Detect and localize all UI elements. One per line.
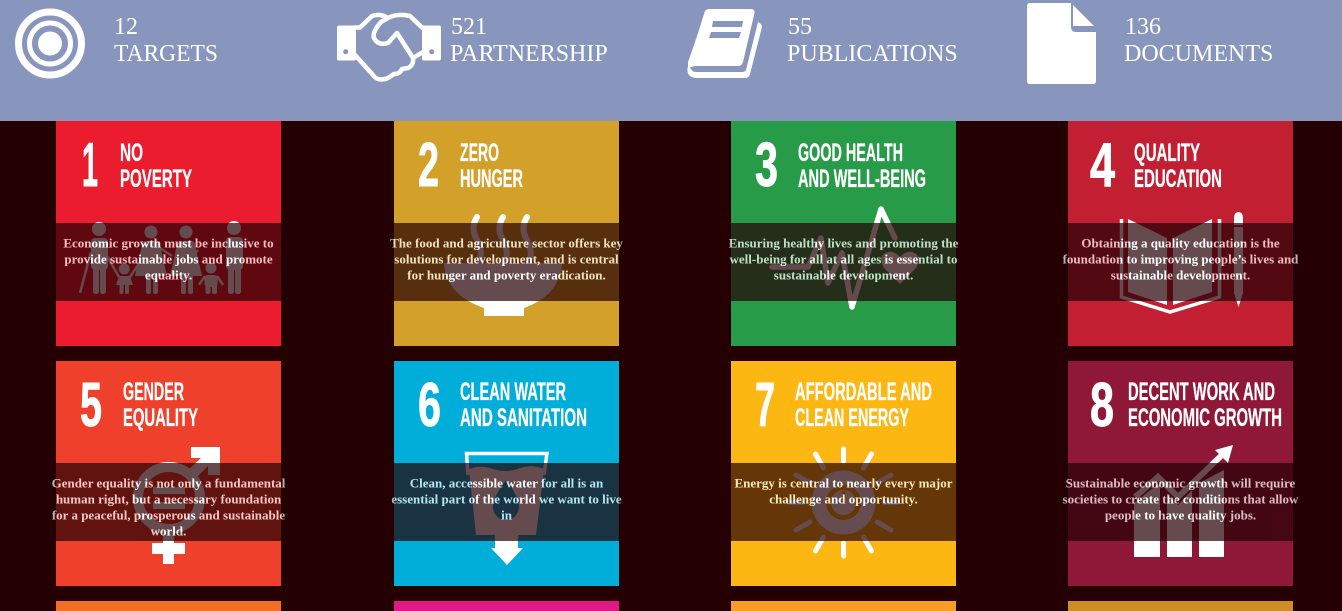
- stat: publications: 55: [788, 14, 812, 40]
- icon: book and pencil: [1122, 212, 1243, 312]
- card: goal 3 good health: [729, 121, 959, 346]
- goal title: HUNGER: [460, 165, 523, 193]
- stat: documents: [1124, 14, 1273, 67]
- stat: partnership: PARTNERSHIP: [450, 41, 608, 67]
- goal number 4: 4: [1090, 131, 1115, 200]
- goal title: [1134, 139, 1222, 193]
- goal title: AFFORDABLE AND: [795, 378, 932, 406]
- goal description: Ensuring healthy lives and promoting the: [729, 236, 959, 250]
- text overlay with description: [56, 223, 281, 301]
- stat: publications: PUBLICATIONS: [787, 41, 958, 67]
- goal title: [123, 378, 198, 432]
- goal title: GOOD HEALTH: [798, 139, 903, 167]
- goal title: POVERTY: [120, 165, 192, 193]
- card: goal 11 partial: [731, 601, 956, 611]
- goal number 6: 6: [418, 371, 441, 440]
- goal description: challenge and opportunity.: [769, 492, 918, 506]
- card: goal 8 decent work: [1063, 361, 1299, 586]
- stat: targets: 12: [114, 14, 138, 40]
- goal description: in: [501, 508, 513, 522]
- goal description: sustainable development.: [1111, 268, 1250, 282]
- goal title: [798, 139, 926, 193]
- goal description: provide sustainable jobs and promote: [64, 252, 273, 266]
- card: goal 6 clean water: [391, 361, 622, 586]
- stat: partnership: 521: [451, 14, 487, 40]
- goal title: QUALITY: [1134, 139, 1200, 167]
- card: goal 10 partial: [394, 601, 619, 611]
- goal number 2: 2: [418, 131, 439, 200]
- goal description: Economic growth must be inclusive to: [63, 236, 274, 250]
- card: goal 5 gender equality: [52, 361, 286, 586]
- goal description: foundation to improving people’s lives and: [1063, 252, 1299, 266]
- icon: sun with power symbol: [789, 449, 898, 556]
- card: goal 2 zero hunger: [390, 121, 623, 346]
- card: goal 12 partial: [1068, 601, 1293, 611]
- goal description: Sustainable economic growth will require: [1066, 476, 1296, 490]
- goal description: The food and agriculture sector offers key: [390, 236, 623, 250]
- goal title: CLEAN WATER: [460, 378, 566, 406]
- card: goal 1 no poverty: [56, 121, 281, 346]
- icon: target: [18, 12, 82, 75]
- goal description: societies to create the conditions that allow: [1063, 492, 1299, 506]
- card: goal 9 partial: [56, 601, 281, 611]
- text overlay with description: [391, 463, 622, 541]
- goal description: Obtaining a quality education is the: [1081, 236, 1280, 250]
- goal title: AND WELL-BEING: [798, 165, 926, 193]
- goal title: CLEAN ENERGY: [795, 404, 909, 432]
- icon: growth chart: [1134, 445, 1233, 557]
- goal number 8: 8: [1090, 371, 1114, 440]
- text overlay with description: [52, 463, 286, 541]
- text overlay with description: [1063, 463, 1299, 541]
- goal description: human right, but a necessary foundation: [56, 492, 282, 506]
- goal title: ZERO: [460, 139, 499, 167]
- stat: documents: 136: [1125, 14, 1161, 40]
- goal number 7: 7: [755, 371, 775, 440]
- goal description: sustainable development.: [774, 268, 913, 282]
- goal description: equality.: [145, 268, 192, 282]
- goal description: essential part of the world we want to live: [391, 492, 622, 506]
- icon: heartbeat: [772, 209, 919, 307]
- goal description: for a peaceful, prosperous and sustainable: [52, 508, 285, 522]
- card: goal 7 clean energy: [731, 361, 956, 586]
- goal description: Energy is central to nearly every major: [734, 476, 953, 490]
- goal description: Clean, accessible water for all is an: [410, 476, 604, 490]
- icon: family: [80, 221, 243, 294]
- stat: targets: TARGETS: [114, 41, 218, 67]
- goal title: EQUALITY: [123, 404, 198, 432]
- goal description: solutions for development, and is central: [394, 252, 619, 266]
- goal title: [460, 378, 587, 432]
- text overlay with description: [390, 223, 623, 301]
- stat: targets: [114, 14, 218, 67]
- goal title: [460, 139, 523, 193]
- icon: book: [687, 9, 762, 78]
- icon: gender symbol: [138, 447, 220, 564]
- card: goal 4 quality education: [1063, 121, 1299, 346]
- goal description: well-being for all at all ages is essential to: [730, 252, 957, 266]
- goal description: for hunger and poverty eradication.: [407, 268, 606, 282]
- goal title: [795, 378, 932, 432]
- goal title: NO: [120, 139, 143, 167]
- icon: water glass: [466, 454, 547, 565]
- icon: handshake: [337, 15, 441, 79]
- goal title: AND SANITATION: [460, 404, 587, 432]
- goal number 3: 3: [755, 131, 778, 200]
- goal title: EDUCATION: [1134, 165, 1222, 193]
- header stats band: [0, 0, 1342, 121]
- goal number 5: 5: [80, 371, 102, 440]
- goal description: world.: [151, 524, 186, 538]
- icon: bowl with steam: [444, 217, 562, 316]
- goal title: [120, 139, 192, 193]
- goal title: [1128, 378, 1282, 432]
- icon: document: [1027, 3, 1096, 84]
- stat: partnership: [450, 14, 608, 67]
- card: goal 1 no poverty: 1: [82, 131, 98, 200]
- stat: publications: [787, 14, 958, 67]
- goal description: people to have quality jobs.: [1105, 508, 1256, 522]
- text overlay with description: [1063, 223, 1299, 301]
- text overlay with description: [729, 223, 959, 301]
- goal title: GENDER: [123, 378, 184, 406]
- goal description: Gender equality is not only a fundamental: [52, 476, 286, 490]
- text overlay with description: [731, 463, 956, 541]
- stat: documents: DOCUMENTS: [1124, 41, 1273, 67]
